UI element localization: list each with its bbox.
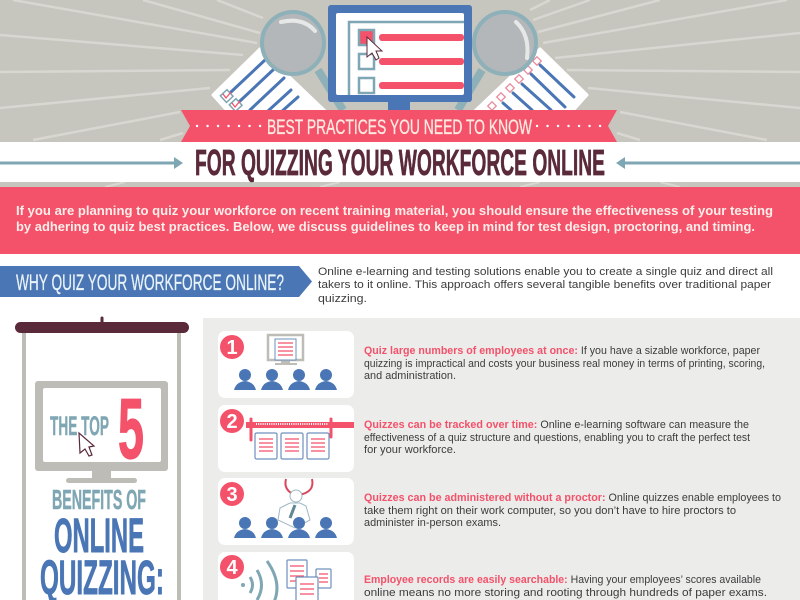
panel: benefits background (203, 318, 800, 600)
card 3: 3 (226, 484, 238, 506)
text: the top: THE TOP (50, 411, 109, 441)
text: benefit 2: for your workforce. (364, 444, 456, 456)
text: benefit 4 (364, 574, 767, 599)
text: benefit 1 (364, 345, 765, 382)
card 4 (218, 552, 354, 600)
icon: people (234, 369, 337, 390)
text: benefit 3: take them right on their work computer, so you don’t have to hire proctors to (364, 505, 736, 517)
text: benefit 3 (364, 492, 781, 529)
text: 5: 5 (118, 382, 144, 477)
arrow: left title arrow (0, 157, 183, 169)
illustration: computer monitor with quiz (328, 5, 472, 115)
text: benefit 2 (364, 419, 750, 456)
intro panel (0, 187, 800, 254)
intro panel: If you are planning to quiz your workforce on recent training material, you should ensure the effectiveness of your testing (16, 204, 773, 218)
icon: people (234, 517, 337, 538)
text: benefits of: BENEFITS OF (52, 484, 146, 515)
text: benefit 4: Employee records are easily searchable: Having your employees’ scores available (364, 574, 761, 586)
card 4: 4 (226, 557, 238, 579)
card 1: 1 (226, 337, 238, 359)
icon: proctor (278, 479, 312, 528)
section intro text: takers to it online. This approach offers several tangible benefits over traditional paper (318, 279, 771, 291)
intro panel: by adhering to quiz best practices. Below, we discuss guidelines to keep in mind for test design, proctoring, and timing. (16, 220, 755, 234)
illustration: left quiz paper (213, 49, 345, 180)
icon: monitor (268, 335, 303, 365)
card 2: 2 (226, 411, 238, 433)
text: benefit 2: effectiveness of a quiz structure and questions, enabling you to craft the perfect test (364, 432, 750, 444)
illustration: left magnifying glass (262, 12, 343, 110)
arrow: right title arrow (616, 157, 800, 169)
text: benefit 1: and administration. (364, 370, 456, 382)
icon: cursor (79, 433, 94, 456)
illustration: right quiz paper (455, 49, 587, 180)
text: benefit 3: Quizzes can be administered without a proctor: Online quizzes enable employees to (364, 492, 781, 504)
text: benefit 3: administer in-person exams. (364, 517, 501, 529)
panel: top 5 banner: ONLINE (54, 510, 144, 563)
section intro text: Online e-learning and testing solutions enable you to create a single quiz and direct all (318, 266, 773, 278)
panel: top 5 banner (15, 318, 189, 600)
icon: documents (255, 433, 329, 459)
icon: ruler (246, 419, 354, 440)
card 2 (218, 405, 354, 472)
text: benefit 1: quizzing is impractical and costs your business real money in terms of printing, scoring, (364, 358, 765, 370)
card 1 (218, 331, 354, 398)
text: benefit 2: Quizzes can be tracked over time: Online e-learning software can measure the (364, 419, 749, 431)
icon: signal waves (241, 561, 277, 600)
text: benefit 1: Quiz large numbers of employees at once: If you have a sizable workforce, paper (364, 345, 760, 357)
card 3 (218, 478, 354, 545)
icon: documents (287, 560, 331, 600)
section intro text: quizzing. (318, 293, 367, 305)
section intro text (318, 266, 773, 305)
illustration: right magnifying glass (458, 12, 536, 110)
section heading: why quiz (0, 266, 312, 297)
text: benefit 4: online means no more storing and rooting through hundreds of paper exams. (364, 587, 767, 599)
ribbon: best practices: BEST PRACTICES YOU NEED TO KNOW (267, 116, 532, 139)
section heading: why quiz: WHY QUIZ YOUR WORKFORCE ONLINE? (16, 270, 284, 295)
icon: gray monitor (35, 381, 168, 483)
white title band (0, 142, 800, 182)
ribbon: best practices (181, 110, 617, 142)
